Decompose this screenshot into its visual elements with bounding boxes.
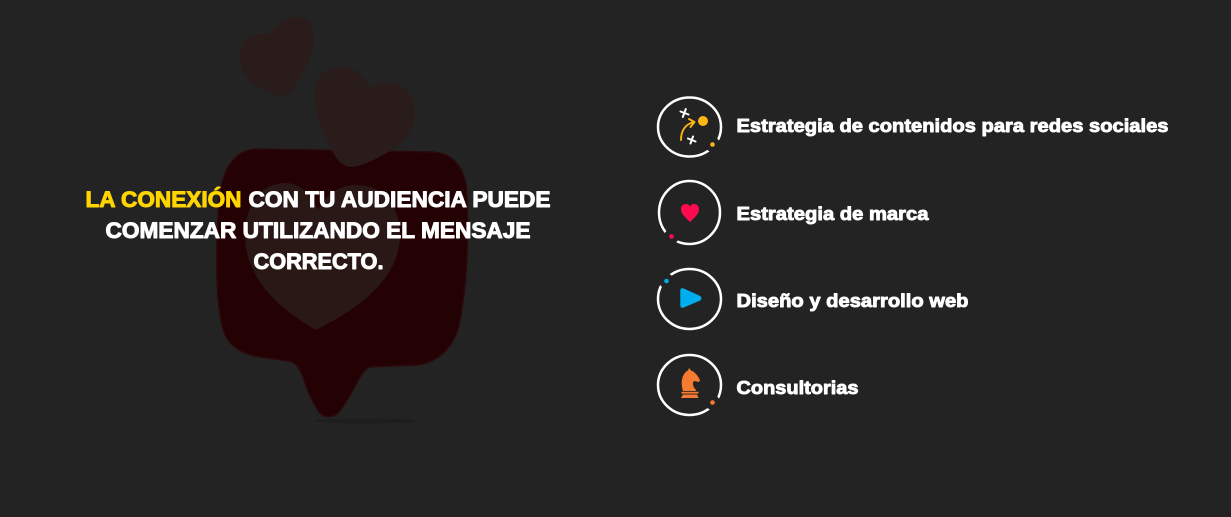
speech bubble xyxy=(217,149,468,417)
service item: web design xyxy=(658,269,968,329)
headline: CON TU AUDIENCIA PUEDE xyxy=(248,187,550,212)
floating heart small xyxy=(240,17,313,96)
icon: chess knight xyxy=(658,355,721,415)
headline: LA CONEXIÓN xyxy=(86,187,242,212)
shadow under bubble xyxy=(315,418,415,424)
illustration: dimmed speech bubble with hearts xyxy=(217,17,468,424)
headline xyxy=(86,187,550,274)
bubble centre heart xyxy=(245,183,400,330)
label: Estrategia de marca xyxy=(736,203,929,224)
service item: brand strategy xyxy=(659,181,929,244)
label: Diseño y desarrollo web xyxy=(736,290,968,311)
icon: play xyxy=(658,269,721,329)
service item: content strategy xyxy=(658,98,1168,156)
label: Estrategia de contenidos para redes sociales xyxy=(736,115,1168,136)
floating heart large xyxy=(315,67,415,167)
service item: consulting xyxy=(658,355,858,415)
label: Consultorias xyxy=(736,377,858,398)
icon: heart xyxy=(659,181,720,244)
headline: CORRECTO. xyxy=(254,249,384,274)
headline: COMENZAR UTILIZANDO EL MENSAJE xyxy=(106,218,530,243)
icon: strategy play diagram xyxy=(658,98,721,156)
